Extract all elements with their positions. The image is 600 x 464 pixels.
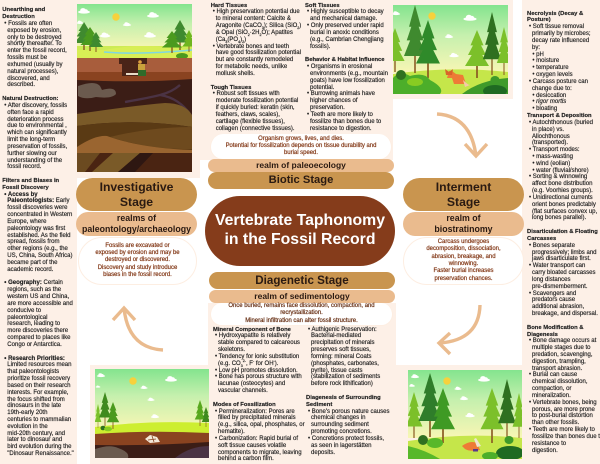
text block: hard and tough tissues: Aragonite (CaCO3); Silica (SiO2) [216, 23, 301, 30]
text block: left column notes: Destruction [2, 14, 35, 20]
text block: left column notes: • Fossils are often [4, 21, 52, 27]
text block: soft tissues and behaviour: • Teeth are more likely to [307, 112, 373, 118]
text block: right column notes: jaws disarticulate first. [532, 256, 591, 262]
text block: left column notes: Filters and Biases in [2, 178, 59, 184]
arrow: biotic to interment [436, 112, 488, 158]
text block: right column notes: to post-burial distortion [532, 413, 593, 419]
text block: hard and tough tissues: for metabolic needs, unlike [216, 64, 287, 70]
text block: left column notes: often face a rapid [7, 110, 54, 116]
text block: left column notes: described. [7, 82, 35, 88]
panel: right text column [522, 0, 600, 464]
text block: right column notes: • Soft tissue removal [529, 24, 584, 30]
text block: left column notes: • Research Priorities: [4, 356, 65, 362]
text block: right column notes: Posture) [527, 17, 551, 23]
text block: hard and tough tissues: • Vertebrate bones and teeth [213, 44, 289, 50]
text block: left column notes: established. As the field [7, 233, 71, 239]
text block: left column notes: evolution in the [7, 424, 48, 430]
text block: left column notes: fossil record. [7, 164, 41, 170]
text block: right column notes: carry bloated carcasses [532, 270, 596, 276]
text block: right column notes: • Transport modes: [529, 147, 580, 153]
text block: soft tissues and behaviour: • Highly susceptible to decay [307, 9, 384, 15]
text block: right column notes: decay rate influenced [532, 38, 589, 44]
text block: right column notes: additional abrasion, [532, 304, 584, 310]
text block: hard and tough tissues: but are constantly remodeled [216, 57, 293, 63]
text block: soft tissues and behaviour: goats) have low fossilization [310, 78, 385, 84]
text block: left column notes: preservation of fossils, [7, 144, 67, 150]
text block: left column notes: became part of the [7, 260, 57, 266]
text block: left column notes: exhumed (usually by [7, 62, 62, 68]
heading: biotic stage [208, 172, 394, 188]
text block: right column notes: • oxygen levels [532, 72, 573, 78]
text block: soft tissues and behaviour: Behavior & Habitat Influence [305, 57, 385, 63]
text block: hard and tough tissues: collagen (connective tissues). [216, 126, 295, 132]
text block: left column notes: • After discovery, fossils [4, 103, 67, 109]
image: excavation scene with paleontologist [77, 4, 192, 172]
text block: soft tissues and behaviour: higher chances of [310, 98, 358, 104]
text block: right column notes: • moisture [532, 58, 559, 64]
text block: left column notes [2, 6, 74, 457]
text block: hard and tough tissues: & Opal (SiO2·2H2O); Apatites [216, 30, 293, 37]
icon: fox [445, 69, 470, 87]
text block: left column notes: • Access by [4, 192, 38, 198]
text block: mineral component and fossilization modes: behind a carbon film. [218, 456, 274, 462]
text block: hard and tough tissues: • Robust soft tissues with [213, 91, 280, 97]
text block: left column notes: which can significantly [7, 130, 67, 136]
label: realm of sedimentology: realm of sedimentology [254, 291, 350, 301]
text block: authigenic preservation and sediment diagenesis: • Bone's porous nature causes [308, 409, 390, 415]
text block: authigenic preservation and sediment diagenesis: before rock lithification) [311, 381, 373, 387]
text block: mineral component and fossilization modes: stable compared to calcareous [218, 340, 300, 346]
text block: right column notes: long bones parallel). [532, 215, 586, 221]
text block: left column notes: dinosaurs in the late [7, 403, 61, 409]
heading: biotic stage: Biotic Stage [269, 174, 333, 186]
text block: right column notes: • rigor mortis [532, 99, 566, 105]
text block: left column notes: limit the long-term [7, 137, 55, 143]
text block: left column notes: paleontology was first [7, 226, 65, 232]
text block: right column notes: • Teeth are more likely to [529, 427, 595, 433]
text block: left column notes: Fossil Discovery [2, 185, 49, 191]
text block: soft tissues and behaviour: • Organisms in erosional [307, 64, 372, 70]
text block: mineral component and fossilization modes [213, 326, 305, 462]
text block: right column notes: • Water transport can [529, 263, 585, 269]
text block: authigenic preservation and sediment diagenesis: preserves soft tissues, [311, 347, 371, 353]
heading: diagenetic stage [209, 272, 395, 289]
text block: left column notes: are more accessible and [7, 301, 73, 307]
callout: biotic stage summary: Potential for fossilization depends on tissue durability and [226, 143, 376, 149]
text block: soft tissues and behaviour: fossils). [310, 44, 330, 50]
text block: left column notes: more discoveries there [7, 328, 68, 334]
image: buried bones in sediment [95, 369, 209, 458]
callout: investigative stage summary: Fossils are excavated or [105, 243, 170, 249]
text block: left column notes: discovered, and [7, 76, 50, 82]
text block: left column notes: natural processes), [7, 69, 58, 75]
text block: right column notes: • Vertebrate bones, being [529, 400, 597, 406]
text block: right column notes: • temperature [532, 65, 569, 71]
panel: bottom centre background [208, 303, 396, 464]
text block: mineral component and fossilization modes: • Hydroxyapatite is relatively [215, 333, 290, 339]
text block: right column notes: Allochthonous [532, 134, 570, 140]
text block: right column notes: • Scavengers and [529, 291, 576, 297]
image: carcass on forest floor [408, 370, 522, 459]
text block: left column notes: bird evolution during the [7, 444, 72, 450]
text block: right column notes: • Unidirectional currents [529, 195, 593, 201]
text block: right column notes: predation, scavenging, [532, 352, 593, 358]
callout: investigative stage summary: biases in the fossil record. [103, 272, 172, 278]
text block: soft tissues and behaviour: fossilize than bones due to [310, 119, 381, 125]
text block: right column notes: (transported). [532, 140, 568, 146]
text block: soft tissues and behaviour [305, 2, 388, 132]
text block: authigenic preservation and sediment diagenesis [306, 326, 390, 456]
text block: left column notes: paleontological [7, 315, 47, 321]
title [205, 196, 395, 266]
text block: authigenic preservation and sediment diagenesis: promoting concretions. [311, 429, 372, 435]
text block: soft tissues and behaviour: • Burrowing animals have [307, 91, 375, 97]
text block: soft tissues and behaviour: burial in anoxic conditions [310, 30, 379, 36]
text block: mineral component and fossilization modes: • Permineralization: Pores are [215, 409, 295, 415]
text block: authigenic preservation and sediment diagenesis: deposits. [311, 450, 335, 456]
text block: right column notes: • pH [532, 52, 544, 58]
text block: right column notes: pre-dismemberment. [532, 284, 588, 290]
text block: hard and tough tissues: cartilage (flexible tissues), [216, 119, 285, 125]
text block: left column notes: conducive to [7, 308, 41, 314]
text block: left column notes: interests. For example, [7, 390, 68, 396]
label: realms of paleontology/archaeology [76, 212, 197, 236]
text block: authigenic preservation and sediment diagenesis: Sediment [306, 402, 332, 408]
panel: biotic image background [393, 0, 513, 99]
text block: right column notes: Diagenesis [527, 332, 558, 338]
image: living forest with fox [393, 5, 508, 94]
text block: mineral component and fossilization modes: soft tissue causes volatile [218, 443, 286, 449]
text block: left column notes: compared to places like [7, 335, 70, 341]
text block: mineral component and fossilization modes: lacunae (osteocytes) and [218, 381, 285, 387]
arrow: interment to diagenetic [436, 305, 482, 356]
text block: mineral component and fossilization modes: • Carbonization: Rapid burial of [215, 436, 298, 442]
text block: left column notes: • Geography: Certain [4, 280, 63, 286]
text block: authigenic preservation and sediment diagenesis: Bacterial-mediated [311, 333, 361, 339]
text block: right column notes: breakage, and dispersal. [532, 311, 598, 317]
text block: authigenic preservation and sediment diagenesis: (phosphates, carbonates, [311, 361, 379, 367]
text block: hard and tough tissues: Tough Tissues [211, 85, 251, 91]
text block: soft tissues and behaviour: (e.g., Cambrian Chengjiang [310, 37, 384, 43]
text block: mineral component and fossilization modes: filled by precipitated minerals [218, 415, 296, 421]
text block: right column notes: change due to: [532, 86, 572, 92]
text block: left column notes: further slowing our [7, 151, 57, 157]
text block: hard and tough tissues: (Ca3(PO4)2) [216, 37, 246, 44]
text block: soft tissues and behaviour: environments (e.g., mountain [310, 71, 388, 77]
panel: bottom-right image background [396, 365, 522, 464]
text block: left column notes: Congo or Antarctica. [7, 342, 62, 348]
text block: hard and tough tissues: Hard Tissues [211, 3, 247, 9]
text block: left column notes: research, leading to [7, 321, 60, 327]
text block: left column notes: Paleontologists: Early [7, 198, 69, 204]
text block: left column notes: regions, such as the [7, 287, 61, 293]
text block: left column notes: based on their research [7, 383, 70, 389]
text block: right column notes: • Burial can cause [529, 372, 577, 378]
text block: left column notes: enter the fossil record, [7, 48, 67, 54]
text block: left column notes: due to environmental , [7, 123, 67, 129]
callout: diagenetic stage summary [210, 303, 393, 326]
text block: mineral component and fossilization modes: hematite). [218, 429, 245, 435]
callout: biotic stage summary: burial speed. [284, 150, 318, 156]
text block: right column notes: long distances [532, 277, 570, 283]
text block: right column notes: orient bones predictably [532, 202, 596, 208]
text block: right column notes: • mass-wasting [532, 154, 573, 160]
heading: interment stage [403, 178, 524, 211]
text block: hard and tough tissues: to mineral content: Calcite & [216, 16, 291, 22]
title: in the Fossil Record [224, 231, 375, 248]
text block: left column notes: Europe, where [7, 219, 46, 225]
callout: interment stage summary: Faster burial increases [433, 268, 494, 274]
text block: left column notes: later to dinosaur and [7, 437, 62, 443]
text block: right column notes: Necrolysis (Decay & [527, 11, 583, 17]
text block: hard and tough tissues [210, 2, 301, 132]
text block: mineral component and fossilization modes: • Tendency for ionic substitution [215, 354, 299, 360]
text block: soft tissues and behaviour: resistance to digestion. [310, 126, 372, 132]
callout: interment stage summary: winnowing. [449, 261, 478, 267]
title: Vertebrate Taphonomy [215, 212, 385, 229]
text block: right column notes: resistance to [532, 441, 566, 447]
panel: bottom-left image background [90, 365, 208, 464]
text block: right column notes: digestion, trampling, [532, 359, 586, 365]
text block: hard and tough tissues: have good fossilization potential [216, 50, 301, 56]
panel: top centre background [200, 0, 393, 160]
text block: left column notes: shortly thereafter. To [7, 41, 62, 47]
callout: investigative stage summary: exposed by erosion and may be [95, 250, 180, 256]
text block: soft tissues and behaviour: potential. [310, 85, 334, 91]
text block: right column notes: (e.g. Voorhies groups). [532, 188, 593, 194]
text block: hard and tough tissues: if quickly buried: keratin (skin, [216, 105, 295, 111]
callout: investigative stage summary: Discovery and study introduce [98, 265, 177, 271]
text block: mineral component and fossilization modes: (e.g., silica, opal, phosphates, or [218, 422, 305, 428]
arrow: diagenetic to investigative [112, 306, 164, 352]
callout: investigative stage summary: destroyed or discovered. [105, 257, 170, 263]
text block: right column notes: Bone Modification & [527, 325, 584, 331]
text block: right column notes: • water (fluvial/shore) [532, 168, 589, 174]
text block: right column notes: primarily by microbes; [532, 31, 590, 37]
text block: right column notes: (flat surfaces convex up, [532, 209, 597, 215]
text block: left column notes: Natural Destruction: [2, 96, 58, 102]
text block: right column notes: • Autochthonous (buried [529, 120, 593, 126]
label: realms of paleontology/archaeology: paleontology/archaeology [82, 224, 191, 234]
text block: left column notes: exposed by erosion, [7, 28, 61, 34]
callout: interment stage summary: abrasion, breakage, and [431, 254, 496, 260]
text block: hard and tough tissues: feathers, claws, scales), [216, 112, 280, 118]
text block: right column notes: • Bone damage occurs at [529, 338, 596, 344]
heading: investigative stage: Stage [120, 194, 153, 208]
text block: right column notes: compaction, or [532, 386, 571, 392]
text block: authigenic preservation and sediment diagenesis: (stabilization of sediments [311, 374, 380, 380]
text block: right column notes: porous, are more prone [532, 407, 595, 413]
text block: soft tissues and behaviour: • Only preserved under rapid [307, 23, 384, 29]
panel: top-left background [0, 0, 200, 178]
heading: diagenetic stage: Diagenetic Stage [255, 274, 349, 287]
text block: left column notes: concentrated in Western [7, 212, 72, 218]
text block: left column notes: other regions (e.g., the [7, 246, 68, 252]
label: realm of biostratinomy [403, 212, 524, 236]
callout: biotic stage summary: Organism grows, lives, and dies. [258, 136, 344, 142]
text block: left column notes: understanding of the [7, 158, 62, 164]
callout: diagenetic stage summary: recrystallization. [280, 310, 323, 316]
text block: right column notes: • bloating [532, 106, 557, 112]
text block: left column notes: western US and China, [7, 294, 69, 300]
callout: interment stage summary [403, 237, 524, 285]
text block: right column notes: • desiccation [532, 93, 566, 99]
label: realm of paleoecology: realm of paleoecology [256, 160, 346, 170]
text block: left column notes: fossil discoveries were [7, 205, 67, 211]
text block: left column notes: centuries to mammalian [7, 417, 71, 423]
label: realm of biostratinomy: biostratinomy [434, 224, 493, 234]
text block: right column notes: progressively; limbs and [532, 250, 597, 256]
text block: right column notes: chemical dissolution, [532, 379, 588, 385]
text block: authigenic preservation and sediment diagenesis: Diagenesis of Surrounding [306, 395, 381, 401]
text block: right column notes: • Sorting & winnowing [529, 174, 587, 180]
text block: left column notes: deterioration process [7, 117, 63, 123]
text block: hard and tough tissues: moderate fossilization potential [216, 98, 298, 104]
callout: biotic stage summary [210, 134, 392, 160]
text block: authigenic preservation and sediment diagenesis: precipitation of minerals [311, 340, 375, 346]
text block: left column notes: academic record. [7, 267, 53, 273]
heading: interment stage: Stage [447, 194, 480, 208]
icon: fox carcass [462, 438, 481, 452]
text block: right column notes: • Carcass posture can [529, 79, 588, 85]
text block: hard and tough tissues: • High preservation potential due [213, 9, 300, 15]
text block: authigenic preservation and sediment diagenesis: forming: mineral Coats [311, 354, 372, 360]
callout: interment stage summary: Carcass undergoes [438, 239, 489, 245]
text block: soft tissues and behaviour: and mechanical damage. [310, 16, 377, 22]
heading: investigative stage [76, 178, 197, 211]
text block: left column notes: fossils must be [7, 55, 47, 61]
text block: right column notes: Carcasses [527, 236, 556, 242]
text block: right column notes: Disarticulation & Floating [527, 229, 598, 235]
text block: left column notes: spread, fossils from [7, 239, 59, 245]
label: realms of paleontology/archaeology: realms of [117, 213, 156, 223]
text block: left column notes: "Dinosaur Renaissance." [7, 451, 74, 457]
callout: diagenetic stage summary: Once buried, remains face dissolution, compaction, and [228, 303, 375, 309]
text block: mineral component and fossilization modes: • Bone has porous structure with [215, 374, 302, 380]
text block: left column notes: only to be destroyed [7, 35, 61, 41]
text block: soft tissues and behaviour: preservation. [310, 105, 345, 111]
text block: mineral component and fossilization modes: (e.g. CO32- , F- for OH- ). [218, 359, 278, 368]
text block: mineral component and fossilization modes: • Low pH promotes dissolution. [215, 368, 298, 374]
label: realm of sedimentology [209, 290, 395, 302]
text block: authigenic preservation and sediment diagenesis: chemical changes in [311, 415, 366, 421]
text block: authigenic preservation and sediment diagenesis: • Concretions protect fossils, [308, 436, 384, 442]
text block: right column notes: mineralization. [532, 393, 571, 399]
text block: left column notes: Unearthing and [2, 7, 45, 13]
text block: authigenic preservation and sediment diagenesis: • Authigenic Preservation: [308, 327, 377, 333]
text block: left column notes: US, China, South Africa) [7, 253, 72, 259]
text block: right column notes: Transport & Deposition [527, 113, 592, 119]
text block: right column notes: than other fossils. [532, 420, 579, 426]
text block: mineral component and fossilization modes: Mineral Component of Bone [213, 327, 291, 333]
text block: right column notes: affect bone distribution [532, 181, 592, 187]
text block: right column notes: predators cause [532, 297, 575, 303]
text block: right column notes: digestion. [532, 448, 558, 454]
label: realm of biostratinomy: realm of [446, 213, 481, 223]
panel: left text column [0, 178, 77, 464]
text block: left column notes: prioritize fossil recovery [7, 376, 70, 382]
text block: left column notes: that paleontologists [7, 369, 59, 375]
text block: right column notes: by: [532, 45, 540, 51]
callout: interment stage summary: decomposition, dissociation, [426, 246, 501, 252]
text block: authigenic preservation and sediment diagenesis: surrounding sediment [311, 422, 369, 428]
callout: interment stage summary: preservation chances. [434, 276, 493, 282]
callout: diagenetic stage summary: Mineral infiltration can alter fossil structure. [245, 318, 358, 324]
text block: mineral component and fossilization modes: vascular channels. [218, 388, 268, 394]
text block: mineral component and fossilization modes: Modes of Fossilization [213, 402, 276, 408]
heading: interment stage: Interment [436, 180, 491, 194]
text block: right column notes [527, 10, 600, 454]
text block: mineral component and fossilization modes: skeletons. [218, 347, 245, 353]
text block: soft tissues and behaviour: Soft Tissues [305, 3, 340, 9]
text block: mineral component and fossilization modes: components to migrate, leaving [218, 450, 302, 456]
text block: left column notes: the focus shifted from [7, 396, 65, 402]
text block: left column notes: 19th-early 20th [7, 410, 47, 416]
text block: right column notes: • Bones separate [529, 243, 575, 249]
text block: right column notes: transport abrasion. [532, 366, 582, 372]
text block: authigenic preservation and sediment diagenesis: as seen in lagerstätten [311, 443, 372, 449]
text block: right column notes: in place) vs. [532, 127, 564, 133]
text block: hard and tough tissues: mollusk shells. [216, 71, 255, 77]
heading: investigative stage: Investigative [100, 180, 173, 194]
text block: left column notes: Limited resources mean [7, 362, 72, 368]
text block: authigenic preservation and sediment diagenesis: pyrite), tissue casts [311, 368, 362, 374]
label: realm of paleoecology [208, 159, 394, 172]
text block: left column notes: mid-20th century, and [7, 431, 65, 437]
text block: right column notes: multiple stages due to [532, 345, 591, 351]
text block: right column notes: • wind (eolian) [532, 161, 570, 167]
callout: investigative stage summary [78, 237, 197, 285]
